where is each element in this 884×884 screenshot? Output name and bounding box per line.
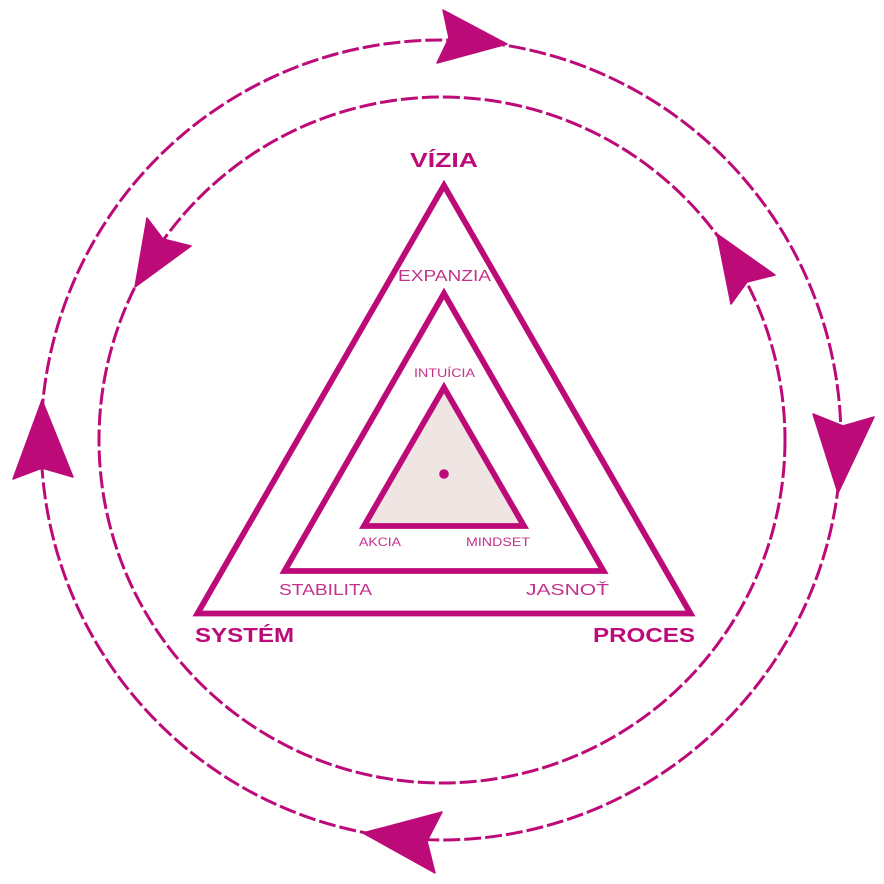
arrow: outer left [13, 400, 73, 479]
label: AKCIA: AKCIA [359, 535, 401, 549]
middle triangle [284, 294, 604, 571]
label: VÍZIA: VÍZIA [410, 149, 478, 172]
label: MINDSET: MINDSET [466, 535, 531, 549]
label: SYSTÉM: SYSTÉM [195, 624, 294, 647]
inner dashed circle [99, 97, 785, 783]
arrow: outer bottom [363, 812, 442, 873]
label: EXPANZIA: EXPANZIA [398, 268, 491, 285]
label: PROCES: PROCES [593, 624, 695, 647]
label: STABILITA: STABILITA [279, 582, 372, 599]
label: JASNOŤ: JASNOŤ [526, 580, 609, 599]
outer triangle [198, 186, 690, 614]
arrow: outer right [813, 414, 874, 493]
arrow: inner right [717, 234, 775, 304]
arrow: inner left [135, 218, 191, 287]
arrow: outer top [437, 10, 507, 63]
center dot [439, 469, 449, 479]
label: INTUÍCIA: INTUÍCIA [414, 365, 475, 380]
inner triangle [364, 388, 524, 526]
